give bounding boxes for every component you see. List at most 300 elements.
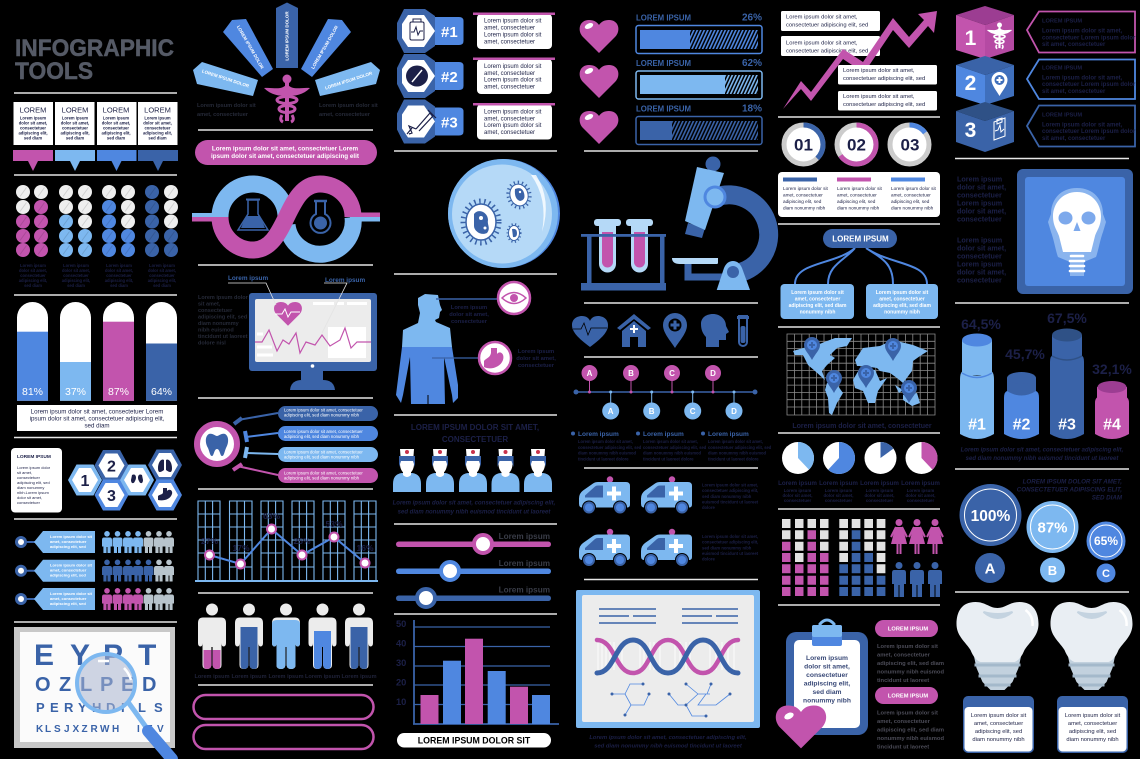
grid line chart: 16% — [356, 543, 374, 553]
tube percentage bars: 37% — [65, 386, 86, 398]
panel: four white text boxes with tabs: LOREM — [62, 106, 88, 114]
pills pictogram: Lorem ipsum — [106, 263, 132, 268]
pie charts: consectetuer — [866, 498, 893, 503]
pie charts: consectetuer — [825, 498, 852, 503]
panel: four white text boxes with tabs: LOREM — [103, 106, 129, 114]
eye chart with magnifier: O — [35, 674, 51, 696]
human silhouette with organ callouts — [396, 282, 556, 404]
card: lorem ipsum note: diam nonummy — [17, 485, 44, 490]
numbered donuts: 03 — [901, 136, 919, 154]
human silhouette with organ callouts: Lorem ipsum — [451, 305, 487, 311]
fan banners with caduceus: LOREM IPSUM DOLOR — [324, 70, 373, 91]
x-ray skull panel: dolor sit amet, — [957, 244, 1006, 252]
grid line chart: 63% — [263, 511, 280, 521]
eye chart with magnifier: L — [80, 674, 92, 696]
x-ray skull panel: Lorem ipsum — [957, 174, 1002, 184]
ambulances: consectetuer adipiscing elit, — [702, 540, 758, 544]
panel: four white text boxes with tabs: consectetuer — [62, 126, 88, 130]
icon: round flask — [310, 201, 330, 233]
pie charts: Lorem ipsum — [819, 480, 858, 487]
growth arrow with note cards: consectetuer adipiscing elit, sed — [843, 102, 925, 108]
numbered cubes and pentagon labels: Lorem ipsum dolor sit amet, — [1042, 28, 1123, 34]
pink text pill: ipsum dolor sit amet, consectetuer adipiscing elit — [211, 153, 360, 160]
monitor with heartbeat: tincidunt ut laoreet — [198, 334, 248, 340]
ABCD timeline: A — [587, 369, 593, 378]
numbered hex badges with text — [397, 9, 555, 144]
legend card: Lorem ipsum dolor sit — [837, 186, 883, 191]
pink label pills with text: tincidunt ut laoreet — [877, 678, 929, 684]
ABCD timeline: D — [710, 369, 716, 378]
hexagon cluster: 3 — [107, 488, 116, 505]
pie charts: consectetuer — [907, 498, 934, 503]
numbered hex badges with text: Lorem ipsum dolor sit — [484, 123, 542, 129]
three text columns: consectetuer adipiscing elit, sed — [708, 445, 772, 450]
numbered donuts: 02 — [847, 136, 866, 154]
icon: tooth — [206, 434, 228, 456]
numbered cubes and pentagon labels: 1 — [965, 27, 977, 50]
clipboard with heart — [776, 620, 868, 748]
x-ray skull panel: Lorem ipsum — [957, 198, 1002, 208]
monitor with heartbeat: nibh euismod — [198, 328, 234, 334]
numbered cubes and pentagon labels: LOREM IPSUM — [1042, 66, 1082, 72]
pills pictogram: consectetuer — [63, 273, 89, 278]
growth arrow with note cards: Lorem ipsum dolor sit amet, — [786, 14, 858, 20]
card: lorem ipsum note: Lorem ipsum dolor — [17, 465, 51, 470]
fan banners with caduceus: LOREM IPSUM DOLOR — [310, 24, 340, 70]
icon: conical flask — [238, 200, 268, 230]
eye chart with magnifier: K — [36, 724, 44, 735]
hexagon cluster: 1 — [81, 473, 90, 490]
x-ray skull panel: Lorem ipsum — [957, 260, 1002, 268]
pills pictogram: consectetuer — [106, 273, 132, 278]
panel: four white text boxes with tabs: adipiscing elit, — [143, 130, 172, 136]
growth arrow with note cards: Lorem ipsum dolor sit amet, — [786, 40, 858, 46]
five body figures: Lorem ipsum — [341, 674, 377, 680]
three text columns: tincidunt ut laoreet dolore — [643, 456, 694, 462]
numbered hex badges with text: #2 — [441, 69, 458, 86]
icon: tablet — [406, 66, 428, 86]
five body figures: Lorem ipsum — [268, 674, 304, 680]
sliders — [396, 532, 551, 607]
ambulances: dolore — [702, 556, 715, 562]
legend card: Lorem ipsum dolor sit — [891, 186, 937, 191]
nurses group: CONSECTETUER — [442, 435, 508, 444]
numbered cubes and pentagon labels: 3 — [965, 119, 976, 142]
fan banners with caduceus: LOREM IPSUM DOLOR — [236, 25, 265, 70]
x-ray skull panel: dolor sit amet, — [957, 182, 1006, 192]
eye chart with magnifier: Y — [78, 700, 87, 715]
human silhouette with organ callouts: consectetuer — [451, 319, 488, 325]
fan banners with caduceus: LOREM IPSUM DOLOR — [201, 69, 250, 89]
tag labels with people: Lorem ipsum dolor sit — [50, 563, 93, 568]
ABCD timeline: B — [628, 369, 634, 378]
monitor with heartbeat: Lorem ipsum dolor — [198, 295, 249, 301]
three text columns: Lorem ipsum dolor sit amet, — [643, 439, 698, 444]
pie charts: dolor sit amet, — [782, 493, 813, 498]
grid line chart: 53% — [325, 519, 343, 529]
org tree: nonummy nibh — [800, 310, 835, 316]
pills pictogram: consectetuer — [149, 273, 175, 278]
DNA caption: sed diam nonummy nibh euismod tincidunt ut laoreet — [594, 744, 743, 750]
tag labels with people: Lorem ipsum dolor sit — [50, 591, 93, 596]
pie charts: dolor sit amet, — [905, 493, 936, 498]
cylinder chart: Lorem ipsum dolor sit amet, consectetuer adipiscing elit, — [961, 448, 1124, 454]
title — [15, 35, 174, 85]
panel: four white text boxes with tabs: LOREM — [144, 106, 171, 114]
hearts and progress bars: LOREM IPSUM — [636, 59, 691, 68]
eye chart with magnifier: S — [54, 724, 61, 735]
cylinder chart: 67,5% — [1047, 310, 1087, 326]
numbered hex badges with text: amet, consectetuer — [484, 71, 535, 77]
fan banners with caduceus: Lorem ipsum dolor sit — [319, 103, 378, 109]
fan banners with caduceus: amet, consectetuer — [319, 112, 371, 118]
card: lorem ipsum note: adipiscing elit, sed — [17, 480, 50, 485]
three text columns: consectetuer adipiscing elit, sed — [578, 445, 642, 450]
human silhouette with organ callouts: Lorem ipsum — [518, 349, 554, 355]
pink label pills with text: amet, consectetuer — [877, 719, 931, 725]
monitor with heartbeat: Lorem ipsum — [228, 275, 268, 282]
bar chart: 40 — [396, 638, 406, 648]
eye chart with magnifier: Z — [82, 724, 88, 735]
panel: four white text boxes with tabs: sed diam — [148, 136, 167, 140]
petri dish with bacteria — [448, 159, 560, 268]
tube percentage bars: 64% — [151, 386, 172, 398]
eye chart with magnifier: L — [45, 724, 51, 735]
panel: four white text boxes with tabs: dolor sit amet, — [143, 120, 172, 126]
clipboard with heart: nonummy nibh — [803, 698, 851, 704]
pie charts: Lorem ipsum — [778, 480, 817, 487]
tag labels with people — [15, 531, 174, 610]
growth arrow with note cards: Lorem ipsum dolor sit amet, — [843, 68, 915, 74]
card: lorem ipsum note — [11, 448, 62, 512]
dental implants with cards: Lorem ipsum dolor sit — [971, 713, 1027, 719]
tooth callouts — [197, 406, 378, 483]
DNA caption: Lorem ipsum dolor sit amet, consectetuer adipiscing elit, — [589, 735, 747, 741]
monitor with heartbeat — [198, 275, 377, 390]
nurses group: Lorem ipsum dolor sit amet, consectetuer adipiscing elit, — [393, 500, 556, 506]
ABCD timeline: B — [649, 407, 655, 416]
ambulances: Lorem ipsum dolor sit amet, — [702, 534, 758, 539]
panel: four white text boxes with tabs: adipiscing elit, — [101, 130, 131, 136]
ambulances: dolore — [702, 505, 715, 510]
human silhouette with organ callouts: consectetuer — [518, 363, 555, 369]
panel: four white text boxes with tabs: dolor sit amet, — [19, 120, 47, 126]
dental implants with cards: diam nonummy nibh — [972, 737, 1025, 743]
eye chart with magnifier: H — [112, 724, 119, 735]
grid line chart: 25% — [293, 536, 311, 546]
pie charts: consectetuer — [784, 498, 811, 503]
eye chart with magnifier: R — [64, 700, 74, 715]
ambulances: sed diam nonummy nibh — [702, 546, 752, 550]
grid line chart: 17% — [232, 543, 250, 553]
clipboard with heart: adipiscing elit, — [804, 680, 850, 688]
numbered cubes and pentagon labels: 2 — [965, 72, 976, 95]
icon: test tube — [737, 316, 749, 346]
pie charts: Lorem ipsum — [860, 480, 899, 487]
legend card: Lorem ipsum dolor sit — [783, 186, 829, 191]
pie charts — [778, 442, 940, 503]
three text columns: Lorem ipsum dolor sit amet, — [708, 439, 763, 444]
dental implants with cards: Lorem ipsum dolor sit — [1065, 713, 1121, 719]
numbered hex badges with text: Lorem ipsum dolor sit — [484, 110, 542, 116]
numbered cubes and pentagon labels: consectetuer Lorem ipsum dolor — [1042, 129, 1136, 135]
eye chart with magnifier: L — [138, 700, 146, 715]
org tree: Lorem ipsum dolor sit — [791, 290, 844, 296]
three text columns: diam nonummy nibh euismod — [578, 450, 636, 456]
infinity flask diagram — [192, 184, 380, 254]
pills pictogram: Lorem ipsum — [63, 263, 89, 268]
pie charts: dolor sit amet, — [823, 493, 854, 498]
growth arrow with note cards: consectetuer adipiscing elit, sed — [786, 22, 868, 28]
monitor with heartbeat: sit amet, — [198, 302, 221, 308]
hexagon cluster — [68, 450, 182, 510]
pills pictogram: adipiscing elit, — [19, 278, 47, 283]
cylinder chart: #4 — [1103, 416, 1121, 434]
eye chart with magnifier: Z — [59, 674, 71, 696]
tube percentage bars: 81% — [22, 386, 43, 398]
percentage circles: LOREM IPSUM DOLOR SIT AMET, — [1023, 478, 1122, 486]
pie charts: Lorem ipsum — [825, 488, 852, 493]
eye chart with magnifier: Y — [70, 639, 90, 672]
pink label pills with text — [875, 620, 944, 750]
hearts and progress bars: 18% — [742, 104, 762, 114]
tooth callouts: adipiscing elit, sed diam nonummy nibh — [284, 454, 360, 460]
medical icon row — [572, 313, 749, 348]
panel: four white text boxes with tabs: sed diam — [24, 136, 42, 140]
ambulances: sed diam nonummy nibh — [702, 494, 752, 499]
clipboard with heart: sed diam — [812, 689, 842, 696]
microscope — [672, 156, 769, 290]
pills pictogram — [16, 185, 178, 288]
ambulances: consectetuer adipiscing elit, — [702, 488, 758, 493]
pills pictogram: sed diam — [153, 283, 171, 288]
percentage circles: A — [985, 560, 996, 578]
percentage circles: 100% — [971, 508, 1011, 525]
dental implants with cards: adipiscing elit, sed — [975, 729, 1022, 735]
numbered hex badges with text: Lorem ipsum dolor sit — [484, 32, 542, 38]
numbered cubes and pentagon labels: Lorem ipsum dolor sit amet, — [1042, 122, 1123, 128]
pink label pills with text: adipiscing elit, sed diam — [877, 728, 944, 734]
hearts and progress bars: LOREM IPSUM — [636, 14, 691, 22]
tube percentage bars — [17, 302, 177, 401]
text box under tubes: sed diam — [84, 422, 110, 430]
pie charts: Lorem ipsum — [866, 488, 893, 493]
pink label pills with text: LOREM IPSUM — [888, 626, 928, 632]
cylinder chart: 32,1% — [1092, 361, 1132, 377]
title: TOOLS — [15, 58, 93, 85]
pink label pills with text: Lorem ipsum dolor sit — [877, 644, 938, 650]
dental implants with cards — [956, 602, 1132, 753]
bar chart: 10 — [396, 697, 406, 707]
tag labels with people: adipiscing elit, sed — [50, 544, 86, 549]
monitor with heartbeat: Lorem ipsum — [325, 277, 365, 284]
eye chart with magnifier: X — [72, 724, 80, 735]
icon: heart beat — [572, 316, 608, 347]
grid line chart — [195, 501, 378, 581]
percentage circles: SED DIAM — [1092, 494, 1123, 502]
bar chart: 50 — [396, 619, 406, 629]
fan banners with caduceus: LOREM IPSUM DOLOR — [284, 11, 290, 61]
growth arrow with note cards — [781, 11, 937, 110]
eye chart with magnifier: P — [36, 700, 45, 715]
x-ray skull panel: consectetuer — [957, 276, 1002, 284]
panel: four white text boxes with tabs: consectetuer — [103, 126, 129, 130]
legend card: amet, consectetuer — [837, 192, 877, 198]
cylinder chart: #1 — [968, 416, 986, 434]
numbered cubes and pentagon labels: consectetuer Lorem ipsum dolor — [1042, 36, 1136, 42]
card: lorem ipsum note: consectetuer — [17, 500, 41, 505]
icon: eye in circle — [498, 282, 530, 314]
pills pictogram: adipiscing elit, — [62, 278, 90, 283]
legend card: diam nonummy nibh — [783, 206, 826, 210]
org tree: nonummy nibh — [884, 310, 920, 316]
pink label pills with text: tincidunt ut laoreet — [877, 744, 929, 750]
test tubes in rack — [581, 219, 666, 290]
x-ray skull panel: consectetuer — [957, 252, 1002, 260]
numbered hex badges with text: amet, consectetuer — [484, 39, 535, 45]
ambulances — [579, 476, 759, 567]
numbered cubes and pentagon labels: sit amet, consectetuer — [1042, 89, 1106, 95]
sliders: Lorem ipsum — [499, 586, 550, 594]
monitor with heartbeat: diam nonummy — [198, 321, 240, 327]
percentage circles: 65% — [1094, 534, 1118, 548]
world map with grid and pins — [787, 334, 935, 430]
x-ray skull panel — [957, 169, 1133, 294]
org tree: amet, consectetuer — [795, 296, 840, 302]
card: lorem ipsum note: LOREM IPSUM — [17, 454, 51, 460]
ABCD timeline: C — [669, 369, 675, 378]
eye chart with magnifier: S — [154, 700, 163, 715]
numbered hex badges with text: Lorem ipsum dolor sit — [484, 64, 542, 70]
sliders: Lorem ipsum — [499, 532, 550, 541]
dental implants with cards: adipiscing elit, sed — [1069, 729, 1116, 735]
hearts and progress bars: 62% — [742, 58, 762, 69]
eye chart with magnifier: V — [157, 724, 164, 735]
numbered hex badges with text: amet, consectetuer — [484, 130, 535, 136]
percentage circles: CONSECTETUER ADIPISCING ELIT, — [1017, 486, 1122, 494]
cylinder chart: #2 — [1013, 416, 1030, 434]
numbered cubes and pentagon labels: LOREM IPSUM — [1042, 18, 1082, 24]
ABCD timeline: C — [690, 407, 696, 416]
tag labels with people: amet, consectetuer — [50, 539, 87, 544]
icon: caduceus — [264, 74, 310, 122]
eye chart with magnifier: E — [121, 674, 134, 696]
sliders: Lorem ipsum — [499, 559, 550, 568]
pills pictogram: adipiscing elit, — [148, 278, 176, 283]
eye chart with magnifier: W — [100, 724, 110, 735]
panel: four white text boxes with tabs: Lorem ipsum — [62, 116, 88, 120]
panel: four white text boxes with tabs: Lorem ipsum — [144, 116, 171, 120]
eye chart with magnifier: P — [100, 674, 113, 696]
panel: four white text boxes with tabs: LOREM — [20, 106, 46, 114]
eye chart with magnifier: D — [142, 674, 156, 696]
panel: four white text boxes with tabs — [13, 102, 178, 171]
three text columns: Lorem ipsum dolor sit amet, — [578, 439, 633, 444]
pink label pills with text: Lorem ipsum dolor sit — [877, 710, 938, 716]
numbered hex badges with text: Lorem ipsum dolor sit — [484, 78, 542, 84]
pie charts: dolor sit amet, — [864, 493, 895, 498]
tag labels with people: Lorem ipsum dolor sit — [50, 534, 93, 539]
dividers — [14, 93, 1129, 685]
fan banners with caduceus — [193, 2, 380, 122]
pills pictogram: sed diam — [24, 283, 42, 288]
bar chart: 20 — [396, 678, 406, 688]
eye chart with magnifier: J — [64, 724, 70, 735]
org tree: adipiscing elit, sed diam — [873, 303, 931, 309]
ambulances: euismod tincidunt ut laoreet — [702, 551, 759, 556]
tag labels with people: adipiscing elit, sed — [50, 601, 86, 606]
nurses group — [393, 423, 556, 516]
tooth callouts: adipiscing elit, sed diam nonummy nibh — [284, 476, 360, 480]
five body figures: Lorem ipsum — [231, 674, 267, 680]
bar chart: LOREM IPSUM DOLOR SIT — [418, 736, 531, 746]
pills pictogram: sed diam — [67, 283, 85, 288]
org tree: adipiscing elit, sed diam — [789, 303, 847, 309]
pills pictogram: consectetuer — [20, 273, 46, 278]
three text columns: Lorem ipsum — [578, 431, 619, 438]
cylinder chart: #3 — [1058, 416, 1076, 434]
pills pictogram: dolor sit amet, — [62, 268, 90, 273]
pink text pill — [195, 140, 377, 165]
tooth callouts: Lorem ipsum dolor sit amet, consectetuer — [284, 450, 363, 454]
pink label pills with text: nonummy nibh euismod — [877, 736, 944, 742]
ABCD timeline: A — [608, 407, 614, 416]
text box under tubes — [17, 405, 177, 431]
five body figures — [194, 604, 377, 680]
panel: four white text boxes with tabs: adipiscing elit, — [60, 130, 90, 136]
numbered hex badges with text: amet, consectetuer — [484, 116, 535, 122]
monitor with heartbeat: consectetuer — [198, 308, 233, 314]
monitor with heartbeat: adipiscing elit, sed — [198, 314, 247, 320]
three text columns: consectetuer adipiscing elit, sed — [643, 445, 707, 450]
legend card: adipiscing elit, sed — [783, 199, 822, 204]
eye chart with magnifier: E — [50, 700, 59, 715]
icon: map pin — [663, 313, 687, 348]
bar chart: 30 — [396, 658, 406, 668]
pills pictogram: dolor sit amet, — [19, 268, 47, 273]
fan banners with caduceus: amet, consectetuer — [197, 112, 249, 118]
pink label pills with text: adipiscing elit, sed diam — [877, 661, 944, 667]
icon: clipboard — [410, 19, 424, 40]
ABCD timeline: D — [731, 407, 737, 416]
panel: four white text boxes with tabs: Lorem ipsum — [103, 116, 129, 120]
numbered hex badges with text: amet, consectetuer — [484, 85, 535, 91]
org tree — [780, 229, 938, 319]
title: INFOGRAPHIC — [15, 35, 174, 62]
pink label pills with text: LOREM IPSUM — [888, 694, 928, 700]
five body figures: Lorem ipsum — [305, 674, 340, 680]
growth arrow with note cards: consectetuer adipiscing elit, sed — [786, 48, 868, 54]
three text columns: tincidunt ut laoreet dolore — [708, 456, 759, 462]
icon: stomach in circle — [479, 342, 511, 374]
three text columns: Lorem ipsum — [708, 431, 749, 438]
pills pictogram: dolor sit amet, — [148, 268, 176, 273]
human silhouette with organ callouts: dolor sit amet, — [516, 356, 556, 362]
percentage circles: B — [1048, 563, 1057, 578]
pills pictogram: dolor sit amet, — [105, 268, 133, 273]
dental implants with cards: amet, consectetuer — [1068, 721, 1117, 727]
pie charts: Lorem ipsum — [901, 480, 940, 487]
pills pictogram: Lorem ipsum — [149, 263, 175, 268]
world map with grid and pins: Lorem ipsum dolor sit amet, consectetuer — [792, 423, 932, 430]
tag labels with people: amet, consectetuer — [50, 568, 87, 573]
ambulances: Lorem ipsum dolor sit amet, — [702, 482, 758, 488]
dental implants with cards: amet, consectetuer — [974, 721, 1023, 727]
pills pictogram: adipiscing elit, — [105, 278, 133, 283]
panel: four white text boxes with tabs: dolor sit amet, — [61, 120, 89, 126]
org tree: Lorem ipsum dolor sit — [876, 290, 929, 296]
legend card: adipiscing elit, sed — [891, 199, 930, 204]
